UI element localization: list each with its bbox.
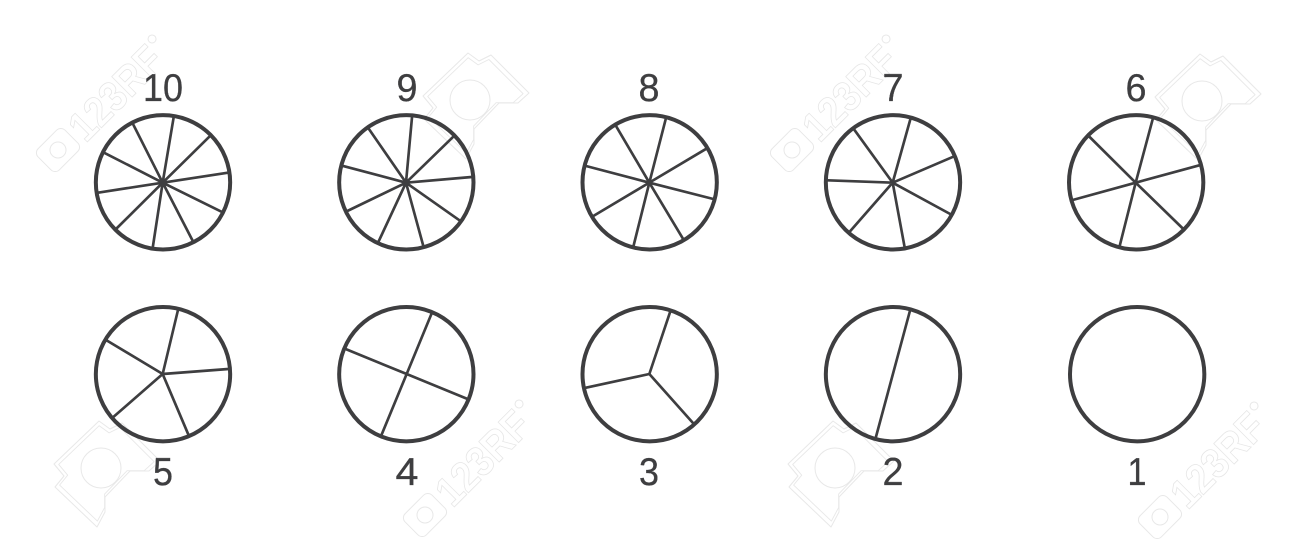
watermark: large camera near 5 [54, 421, 160, 527]
pie: 1 segment [1070, 307, 1204, 441]
label: 7: 7 [882, 67, 904, 110]
watermark: large camera near 9 [423, 53, 529, 159]
pie: 2 segments [826, 307, 960, 441]
pie: 6 segments [1069, 115, 1203, 249]
pie: 5 segments [96, 307, 230, 441]
watermark: logo bottom middle [395, 393, 547, 545]
pie: 4 segments [339, 307, 473, 441]
label: 1: 1 [1128, 451, 1146, 494]
pie: 7 segments [826, 115, 960, 249]
watermark: logo bottom right: 123RF [1161, 403, 1275, 517]
label: 10: 10 [143, 67, 183, 110]
label: 2: 2 [882, 451, 904, 494]
watermark: large camera near 6 [1155, 54, 1261, 160]
label: 6: 6 [1126, 67, 1146, 110]
label: 8: 8 [638, 67, 660, 110]
label: 4: 4 [396, 451, 418, 494]
watermark: logo top middle [762, 28, 914, 180]
label: 9: 9 [396, 67, 418, 110]
pie: 3 segments [582, 307, 717, 441]
watermark: large camera near 2 [788, 421, 894, 527]
label: 5: 5 [153, 451, 173, 494]
pie: 8 segments [582, 115, 717, 249]
watermark: logo bottom right [1130, 395, 1282, 547]
watermark: logo bottom middle: 123RF [426, 401, 540, 515]
pie: 10 segments [96, 115, 230, 249]
label: 3: 3 [639, 451, 659, 494]
pie: 9 segments [339, 115, 473, 249]
watermark: logo top left: 123RF [59, 36, 173, 150]
watermark: logo top middle: 123RF [793, 36, 907, 150]
watermark: logo top left [28, 28, 180, 180]
